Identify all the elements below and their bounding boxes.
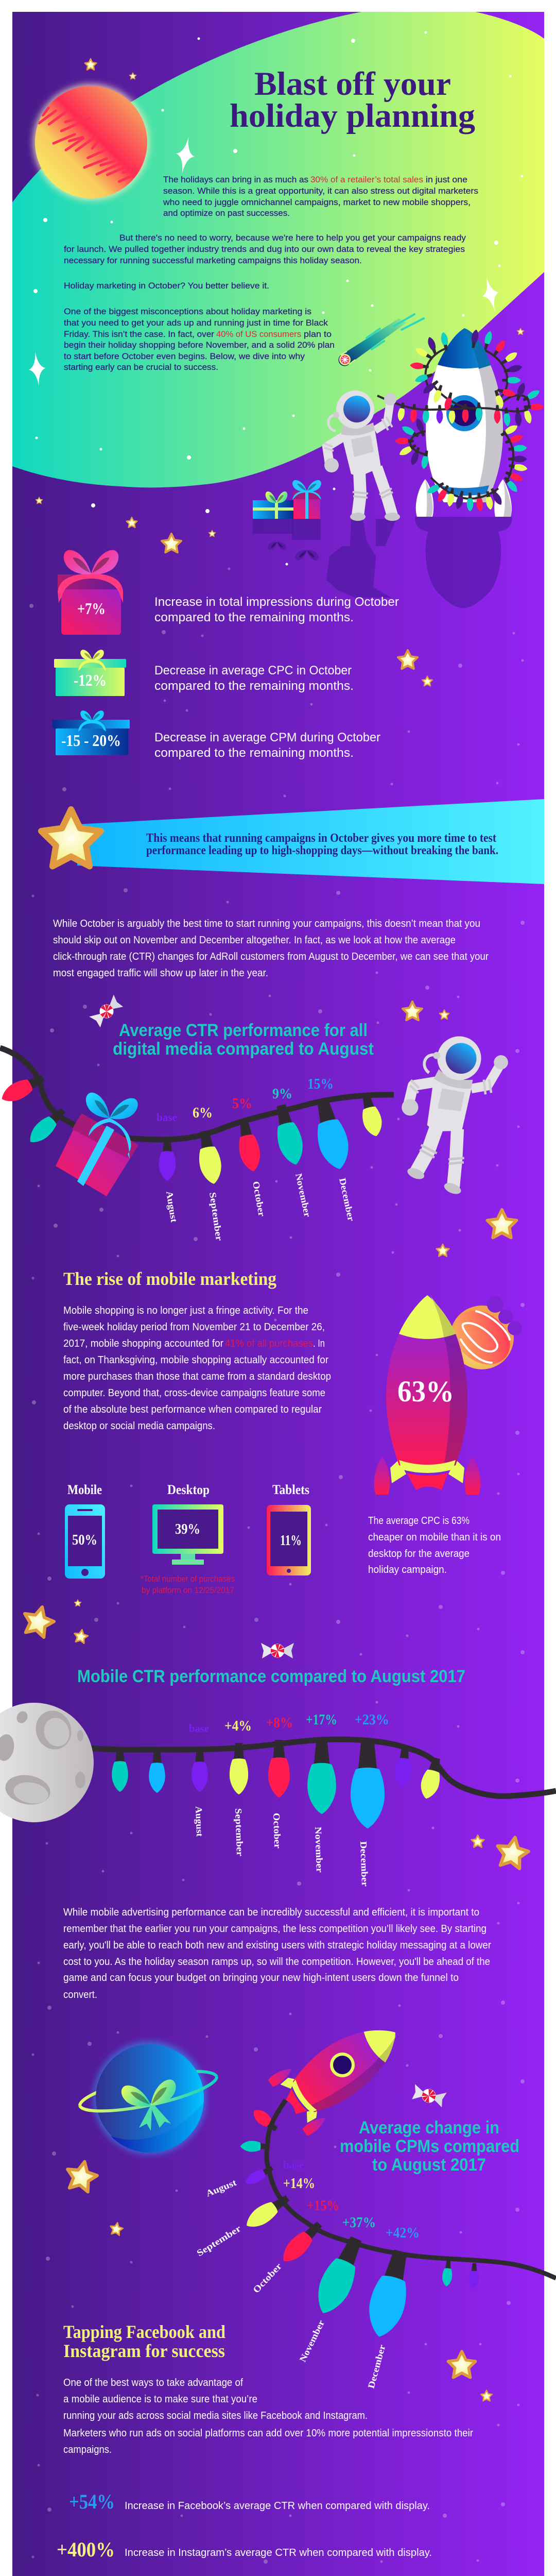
illustration: hero rocket with lights xyxy=(377,328,544,517)
icon: banner star xyxy=(41,809,101,866)
text block: intro: But there's no need to worry, because we're here to help you get your campaigns ready xyxy=(119,233,466,243)
text block: intro: starting early can be crucial to success. xyxy=(64,362,218,372)
chart labels: mobile CTR months: November xyxy=(313,1826,325,1873)
heading: mobile CPMs: mobile CPMs compared xyxy=(340,2137,519,2156)
illustration: blue ribbon planet xyxy=(80,2041,217,2155)
device: desktop xyxy=(152,1482,223,1565)
chart labels: mobile CPM months xyxy=(195,2177,387,2389)
chart: mobile CPM light string xyxy=(240,2100,556,2341)
note: purchases by platform: by platform on 12/25/2017 xyxy=(142,1585,234,1595)
panel: green hero blob xyxy=(12,12,544,487)
stat: Facebook CTR: Increase in Facebook’s average CTR when compared with display. xyxy=(125,2500,430,2512)
text block: intro: to start before October even begins. Below, we dive into why xyxy=(64,351,305,361)
stat: -12% gift xyxy=(54,650,126,696)
text block: intro: in just one xyxy=(426,175,467,184)
stat: Instagram CTR: +400% xyxy=(57,2538,115,2561)
chart labels: mobile CPM months: December xyxy=(366,2344,387,2389)
text block: social media xyxy=(63,2377,473,2455)
text block: average CPC: The average CPC is 63% xyxy=(368,1515,470,1527)
sparkles: hero xyxy=(27,135,503,387)
illustration: tilted rocket xyxy=(268,2004,415,2137)
device: desktop: Desktop xyxy=(167,1482,210,1497)
illustration: 63% rocket xyxy=(374,1295,480,1495)
text block: social media: running your ads across social media sites like Facebook and Instagram. xyxy=(63,2410,368,2421)
heading: average CTR xyxy=(113,1021,374,1059)
heading: average CTR: digital media compared to August xyxy=(113,1039,374,1059)
text block: mobile shopping: more purchases than those that came from a standard desktop xyxy=(63,1371,331,1382)
text block: -15 - 20% description: compared to the remaining months. xyxy=(154,746,354,760)
text block: intro xyxy=(64,175,478,372)
chart labels: mobile CPM months: September xyxy=(195,2223,242,2258)
text block: mobile shopping: computer. Beyond that, cross-device campaigns feature some xyxy=(63,1387,325,1399)
illustration: floating astronaut xyxy=(377,1024,515,1196)
chart labels: mobile CTR values: +4% xyxy=(224,1718,252,1734)
text block: average CPC: cheaper on mobile than it is on xyxy=(368,1532,501,1543)
chart: mobile CTR light string xyxy=(90,1739,556,1828)
text block: mobile shopping: . In xyxy=(313,1338,325,1349)
illustration: donut xyxy=(443,1296,522,1376)
text block: +7% description: Increase in total impressions during October xyxy=(154,595,399,609)
chart labels: CTR values: base xyxy=(157,1111,177,1124)
text block: social media: campaigns. xyxy=(63,2444,112,2455)
text block: mobile advertising: cost to you. As the holiday season ramps up, so will the competition. However, you'll be ahead of the xyxy=(63,1956,490,1968)
text block: October note xyxy=(53,918,489,979)
planet: orange striped xyxy=(33,84,149,200)
text block: -15 - 20% description xyxy=(154,731,380,760)
text block: October note: While October is arguably the best time to start running your campaigns, this doesn’t mean that you xyxy=(53,918,480,929)
chart labels: mobile CPM values xyxy=(283,2158,420,2241)
heading: tapping Facebook and Instagram: Instagram for success xyxy=(63,2341,225,2361)
title: holiday planning xyxy=(230,97,475,134)
chart labels: mobile CPM months: November xyxy=(298,2318,326,2364)
chart labels: mobile CPM values: +14% xyxy=(283,2176,315,2192)
heading: tapping Facebook and Instagram: Tapping Facebook and xyxy=(63,2321,225,2342)
chart labels: mobile CPM values: +15% xyxy=(307,2198,339,2214)
icon: candy xyxy=(261,1643,294,1658)
text block: average CPC: desktop for the average xyxy=(368,1548,470,1560)
chart labels: mobile CTR months: December xyxy=(358,1841,370,1887)
stars: devices xyxy=(20,1600,89,1643)
heading: tapping Facebook and Instagram xyxy=(63,2321,225,2361)
text block: +7% description xyxy=(154,595,399,624)
device: mobile xyxy=(65,1482,105,1579)
text block: social media: Marketers who run ads on social platforms can add over 10% more potential impressionsto their xyxy=(63,2428,473,2439)
text block: intro: necessary for running successful marketing campaigns this holiday season. xyxy=(64,256,362,265)
text block: mobile advertising: While mobile advertising performance can be incredibly successful and efficient, it is important to xyxy=(63,1907,479,1918)
stat: Instagram CTR: Increase in Instagram’s average CTR when compared with display. xyxy=(125,2547,432,2558)
text block: -15 - 20% description: Decrease in average CPM during October xyxy=(154,731,380,744)
text block: intro: who need to juggle omnichannel campaigns, market to new mobile shoppers, xyxy=(163,197,471,207)
stat: Facebook CTR xyxy=(69,2490,430,2513)
text block: +7% description: compared to the remaining months. xyxy=(154,611,354,624)
device: mobile: 50% xyxy=(72,1532,97,1548)
text block: mobile shopping: 2017, mobile shopping accounted for xyxy=(63,1338,223,1349)
stat: 63%: 63% xyxy=(397,1375,454,1408)
text block: mobile advertising: early, you'll be able to reach both new and existing users with strategic holiday messaging at a lower xyxy=(63,1940,491,1951)
chart labels: mobile CTR values xyxy=(189,1712,389,1735)
text block: mobile shopping: fact, on Thanksgiving, mobile shopping actually accounted for xyxy=(63,1354,328,1366)
text block: mobile shopping xyxy=(63,1305,331,1432)
device: mobile: Mobile xyxy=(67,1482,102,1497)
text block: October note: should skip out on November and December altogether. In fact, as we look at how the average xyxy=(53,935,456,946)
stat: -15 - 20% gift: -15 - 20% xyxy=(61,731,121,750)
heading: mobile CPMs: to August 2017 xyxy=(372,2155,486,2175)
chart labels: mobile CPM values: +37% xyxy=(342,2215,376,2231)
icon: tilted gift xyxy=(56,1092,138,1196)
text block: intro: One of the biggest misconceptions about holiday marketing is xyxy=(64,307,311,316)
text block: average CPC xyxy=(368,1515,501,1575)
text block: mobile advertising xyxy=(63,1907,491,2001)
chart labels: mobile CPM values: +42% xyxy=(386,2225,420,2241)
stars: hero xyxy=(85,59,524,335)
icon: hero gifts xyxy=(253,480,321,519)
text block: -12% description: compared to the remaining months. xyxy=(154,679,354,693)
text block: intro: that you need to get your ads up and running just in time for Black xyxy=(64,318,328,328)
illustration: hero astronaut xyxy=(323,391,400,521)
text block: intro: and optimize on past successes. xyxy=(163,208,290,218)
chart labels: mobile CPM months: August xyxy=(204,2177,238,2199)
heading: average CTR: Average CTR performance for all xyxy=(119,1021,368,1040)
text block: intro: The holidays can bring in as much as xyxy=(163,175,308,184)
stars: mobile CPM xyxy=(64,2159,492,2401)
heading: mobile CPMs xyxy=(340,2118,519,2175)
text block: October note: click-through rate (CTR) changes for AdRoll customers from August to December, we can see that your xyxy=(53,951,489,962)
text block: banner message: performance leading up to high-shopping days—without breaking the bank. xyxy=(146,844,498,857)
text block: intro: Friday. This isn’t the case. In fact, over xyxy=(64,329,214,339)
text block: intro: Holiday marketing in October? You better believe it. xyxy=(64,281,269,291)
chart labels: CTR values: 9% xyxy=(272,1086,292,1102)
text block: intro: 30% of a retailer’s total sales xyxy=(310,175,423,184)
chart labels: mobile CTR months: October xyxy=(271,1812,283,1849)
text block: mobile shopping: 41% of all purchases xyxy=(225,1338,313,1349)
chart: CTR light string xyxy=(0,1048,394,1185)
device: tablets: Tablets xyxy=(272,1482,309,1497)
text block: -12% description: Decrease in average CPC in October xyxy=(154,664,352,677)
icon: candy xyxy=(411,2084,447,2108)
heading: mobile CPMs: Average change in xyxy=(359,2118,499,2138)
title xyxy=(230,65,475,134)
text block: banner message: This means that running campaigns in October gives you more time to test xyxy=(146,832,496,845)
text block: intro: begin their holiday shopping before November, and a solid 20% plan xyxy=(64,340,335,350)
device: tablets xyxy=(267,1482,311,1575)
text block: mobile shopping: of the absolute best performance when compared to regular xyxy=(63,1404,322,1415)
chart labels: CTR months: October xyxy=(251,1180,267,1217)
stars: mobile CTR xyxy=(472,1835,530,1870)
chart labels: mobile CTR values: +23% xyxy=(355,1712,389,1728)
text block: mobile shopping: five-week holiday period from November 21 to December 26, xyxy=(63,1321,325,1333)
text block: mobile advertising: remember that the earlier you run your campaigns, the less competition you’ll likely see. By starting xyxy=(63,1923,486,1935)
chart labels: CTR values xyxy=(157,1076,334,1124)
icon: candy xyxy=(89,994,124,1028)
callout: blue banner xyxy=(77,799,544,884)
text block: intro: 40% of US consumers xyxy=(216,329,301,339)
chart labels: CTR values: 15% xyxy=(307,1076,334,1092)
chart labels: CTR months: August xyxy=(164,1190,179,1223)
stars: CTR chart xyxy=(403,1002,517,1257)
heading: rise of mobile marketing: The rise of mobile marketing xyxy=(63,1268,276,1289)
reflection: astronaut and rocket shadows xyxy=(253,517,512,608)
chart labels: mobile CTR months xyxy=(194,1806,370,1887)
text block: October note: most engaged traffic will show up later in the year. xyxy=(53,968,268,979)
stat: -12% gift: -12% xyxy=(74,671,107,689)
stat: Facebook CTR: +54% xyxy=(69,2490,115,2513)
text block: intro: for launch. We pulled together industry trends and dug into our own data to reveal the key strategies xyxy=(64,244,465,254)
heading: mobile CTR: Mobile CTR performance compared to August 2017 xyxy=(77,1667,465,1686)
chart labels: CTR months xyxy=(164,1173,356,1242)
stars: stats area xyxy=(36,497,432,686)
chart labels: mobile CTR months: September xyxy=(233,1808,245,1856)
chart labels: mobile CPM months: October xyxy=(251,2261,284,2295)
stat: +7% gift xyxy=(58,550,123,635)
text block: intro: plan to xyxy=(304,329,332,339)
text block: banner message xyxy=(146,832,498,857)
chart labels: mobile CTR months: August xyxy=(194,1806,205,1837)
note: purchases by platform: *Total number of purchases xyxy=(141,1574,235,1584)
chart labels: mobile CPM values: base xyxy=(283,2158,304,2171)
chart labels: CTR months: November xyxy=(293,1173,313,1218)
chart labels: mobile CTR values: +17% xyxy=(306,1712,337,1728)
title: Blast off your xyxy=(254,65,451,103)
chart labels: CTR months: September xyxy=(207,1192,224,1242)
text block: average CPC: holiday campaign. xyxy=(368,1564,447,1575)
note: purchases by platform xyxy=(141,1574,235,1595)
text block: mobile shopping: desktop or social media campaigns. xyxy=(63,1420,215,1432)
chart labels: CTR values: 6% xyxy=(193,1105,213,1121)
chart labels: CTR values: 5% xyxy=(232,1096,252,1112)
text block: mobile shopping: Mobile shopping is no longer just a fringe activity. For the xyxy=(63,1305,308,1316)
text block: mobile advertising: game and can focus your budget on bringing your new high-intent users down the funnel to xyxy=(63,1972,459,1984)
text block: intro: season. While this is a great opportunity, it can also stress out digital marketers xyxy=(163,186,478,196)
text block: social media: One of the best ways to take advantage of xyxy=(63,2377,243,2388)
chart labels: CTR months: December xyxy=(337,1177,356,1222)
text block: -12% description xyxy=(154,664,354,693)
stat: +7% gift: +7% xyxy=(77,599,106,618)
chart labels: mobile CTR values: +8% xyxy=(266,1715,293,1731)
illustration: moon xyxy=(0,1703,94,1822)
device: tablets: 11% xyxy=(280,1533,302,1549)
text block: social media: a mobile audience is to make sure that you’re xyxy=(63,2394,257,2405)
chart labels: mobile CTR values: base xyxy=(189,1722,209,1735)
icon: comet xyxy=(338,314,424,366)
text block: mobile advertising: convert. xyxy=(63,1989,97,2001)
stat: Instagram CTR xyxy=(57,2538,432,2561)
stat: -15 - 20% gift xyxy=(53,710,130,755)
device: desktop: 39% xyxy=(175,1521,200,1537)
